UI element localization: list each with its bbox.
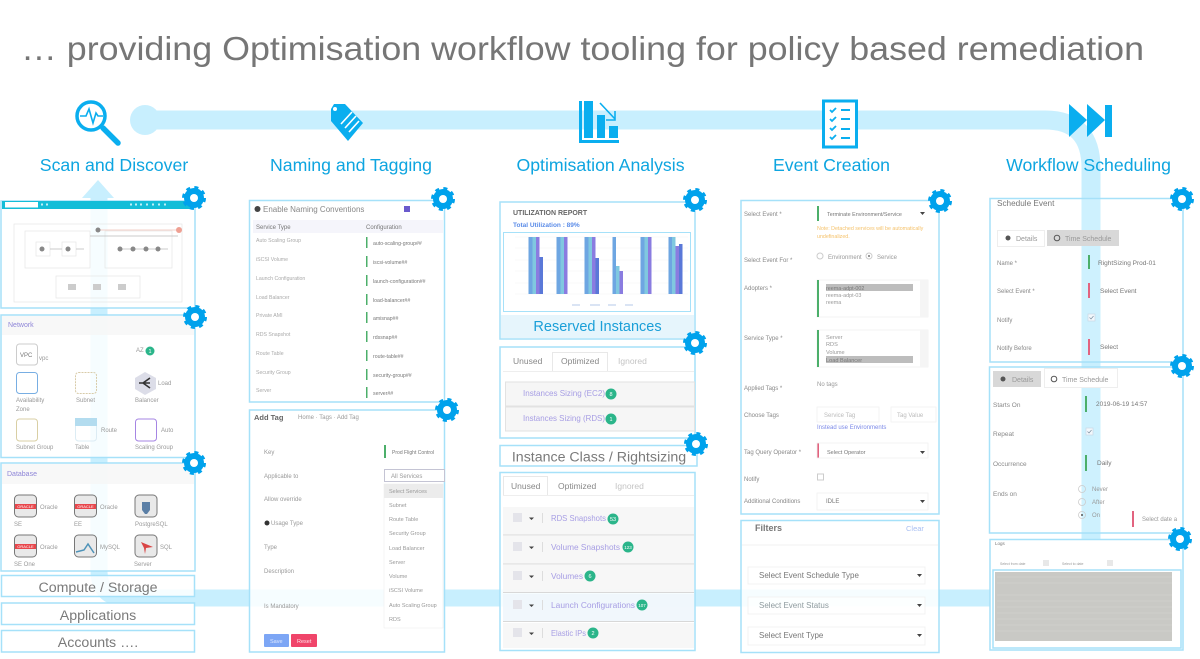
- panel: event creation form: Additional Conditions: [744, 499, 800, 505]
- panel: event creation form: Tag Query Operator *: [744, 450, 802, 456]
- icon: gear 2: [184, 306, 206, 328]
- panel: logs: Logs: [995, 541, 1006, 546]
- box: Instance Class / Rightsizing: Instance Class / Rightsizing: [512, 450, 686, 466]
- panel: event creation form: Terminate Environment/Service: [827, 212, 902, 218]
- panel: unused resources: 107: [638, 603, 646, 608]
- panel: naming conventions: Route Table: [256, 351, 284, 357]
- panel: unused resources: Ignored: [615, 481, 644, 491]
- panel: naming conventions: RDS Snapshot: [256, 332, 291, 338]
- panel: event creation form: reema: [826, 300, 841, 306]
- panel: architecture diagram: [1, 201, 195, 308]
- panel: unused resources: 53: [610, 517, 616, 523]
- panel: add tag form: Allow override: [264, 497, 302, 503]
- icon: gear 11: [1172, 356, 1192, 376]
- panel: naming conventions: Launch Configuration: [256, 276, 305, 282]
- panel: time schedule: Details: [1012, 377, 1034, 384]
- panel: database: Server: [134, 562, 152, 568]
- panel: utilization report: [500, 202, 695, 339]
- panel: naming conventions: Enable Naming Conventions: [263, 205, 364, 214]
- panel: network: 1: [148, 349, 152, 355]
- panel: unused resources: [500, 472, 695, 650]
- panel: time schedule: Never: [1092, 487, 1108, 493]
- panel: unused resources: Launch Configurations: [551, 600, 635, 610]
- panel: add tag form: Applicable to: [264, 474, 299, 480]
- panel: event creation form: Tag Value: [897, 413, 924, 419]
- panel: schedule event details: Schedule Event: [997, 199, 1055, 208]
- icon: gear 12: [1170, 528, 1190, 550]
- panel: add tag form: Reset: [297, 639, 312, 645]
- panel: event creation form: Instead use Environments: [817, 425, 886, 431]
- panel: time schedule: Occurrence: [993, 461, 1027, 468]
- panel: database: Database: [7, 471, 37, 478]
- panel: event creation form: Adopters *: [744, 286, 773, 292]
- icon: gear 9: [930, 190, 950, 212]
- panel: time schedule: Select date a: [1142, 517, 1178, 523]
- panel: network: Zone: [16, 407, 30, 413]
- panel: filters: Select Event Schedule Type: [759, 571, 859, 580]
- panel: event creation form: Service Tag: [824, 413, 855, 419]
- panel: unused resources: RDS Snapshots: [551, 513, 606, 523]
- panel: naming conventions: Security Group: [256, 370, 291, 376]
- heading: Workflow Scheduling: Workflow Scheduling: [1006, 155, 1171, 175]
- icon: gear 4: [432, 188, 454, 210]
- icon: gear 6: [684, 190, 706, 210]
- panel: event creation form: Note: Detached services will be automatically: [817, 226, 924, 232]
- panel: optimized instances: 1: [609, 417, 613, 423]
- panel: unused resources: Elastic IPs: [551, 628, 586, 638]
- panel: unused resources: Unused: [511, 481, 541, 491]
- box: Compute / Storage: [2, 576, 194, 596]
- panel: unused resources: 6: [588, 574, 592, 580]
- panel: schedule event details: Notify: [997, 318, 1012, 324]
- panel: database: SQL: [160, 545, 173, 551]
- panel: event creation form: Notify: [744, 477, 759, 483]
- panel: utilization report: UTILIZATION REPORT: [513, 210, 588, 217]
- panel: naming conventions: load-balancer##: [373, 298, 410, 304]
- panel: event creation form: Choose Tags: [744, 413, 779, 419]
- panel: database: Oracle: [40, 545, 58, 551]
- panel: add tag form: Route Table: [389, 517, 418, 523]
- panel: add tag form: Add Tag: [254, 413, 284, 422]
- heading: Naming and Tagging: Naming and Tagging: [270, 155, 432, 175]
- panel: event creation form: reema-adpt-002: [826, 286, 864, 292]
- panel: unused resources: Optimized: [558, 481, 597, 491]
- panel: add tag form: Select Services: [389, 489, 427, 495]
- panel: network: Balancer: [135, 398, 159, 404]
- panel: naming conventions: rdssnap##: [373, 335, 397, 341]
- panel: schedule event details: RightSizing Prod-01: [1098, 260, 1156, 267]
- panel: network: Subnet Group: [16, 445, 54, 451]
- panel: unused resources: Volume Snapshots: [551, 542, 620, 552]
- panel: network: vpc: [39, 356, 48, 362]
- panel: event creation form: Applied Tags *: [744, 386, 783, 392]
- panel: event creation form: RDS: [826, 342, 838, 348]
- panel: schedule event details: Select: [1100, 344, 1118, 351]
- panel: naming conventions: [250, 200, 444, 402]
- panel: database: SE: [14, 522, 22, 528]
- heading: Optimisation Analysis: Optimisation Analysis: [516, 155, 685, 175]
- panel: naming conventions: server##: [373, 391, 393, 397]
- panel: event creation form: Volume: [826, 350, 845, 356]
- box: Compute / Storage: Compute / Storage: [38, 580, 158, 596]
- panel: add tag form: Auto Scaling Group: [389, 603, 437, 609]
- panel: optimized instances: Unused: [513, 356, 543, 366]
- icon: gear 7: [684, 332, 706, 354]
- panel: naming conventions: Server: [256, 388, 272, 394]
- panel: optimized instances: Ignored: [618, 356, 647, 366]
- panel: event creation form: [741, 200, 939, 514]
- icon: fast forward: [1069, 104, 1112, 137]
- panel: naming conventions: Service Type: [256, 225, 291, 231]
- panel: naming conventions: Configuration: [366, 225, 402, 231]
- panel: time schedule: Repeat: [993, 431, 1014, 438]
- panel: schedule event details: Details: [1016, 236, 1038, 243]
- panel: time schedule: Daily: [1097, 460, 1112, 467]
- panel: optimized instances: Optimized: [561, 356, 600, 366]
- panel: naming conventions: auto-scaling-group##: [373, 241, 422, 247]
- panel: add tag form: Key: [264, 450, 274, 456]
- panel: filters: Select Event Type: [759, 631, 824, 640]
- panel: event creation form: undefinalized.: [817, 234, 850, 240]
- panel: add tag form: Usage Type: [271, 521, 304, 527]
- box: Applications: [2, 603, 194, 624]
- panel: event creation form: Service: [877, 255, 898, 261]
- panel: database: [1, 463, 195, 571]
- panel: network: Subnet: [76, 398, 95, 404]
- panel: database: ORACLE: [77, 504, 94, 509]
- panel: logs: [990, 540, 1183, 650]
- panel: time schedule: [990, 367, 1183, 533]
- panel: time schedule: 2019-06-19 14:57: [1096, 401, 1148, 408]
- icon: gear 3: [184, 452, 204, 474]
- panel: network: AZ: [136, 348, 144, 354]
- panel: add tag form: Server: [389, 560, 405, 566]
- panel: filters: Select Event Status: [759, 601, 829, 610]
- panel: add tag form: Save: [270, 639, 283, 645]
- box: Accounts: [2, 630, 194, 652]
- panel: add tag form: Type: [264, 545, 278, 551]
- panel: add tag form: iSCSI Volume: [389, 588, 423, 594]
- panel: naming conventions: iSCSI Volume: [256, 257, 288, 263]
- panel: naming conventions: Load Balancer: [256, 295, 290, 301]
- panel: unused resources: 123: [624, 545, 632, 550]
- panel: logs: Select from date: [1000, 562, 1026, 566]
- title: … providing Optimisation workflow tooling for policy based remediation: [21, 30, 1144, 67]
- panel: add tag form: Subnet: [389, 503, 407, 509]
- panel: network: Scaling Group: [135, 445, 174, 451]
- panel: event creation form: Load Balancer: [826, 358, 862, 364]
- panel: database: PostgreSQL: [135, 522, 168, 528]
- panel: network: Auto: [161, 428, 174, 434]
- panel: event creation form: No tags: [817, 382, 838, 388]
- panel: naming conventions: security-group##: [373, 373, 412, 379]
- icon: gear 5: [436, 400, 458, 420]
- panel: event creation form: reema-adpt-03: [826, 293, 861, 299]
- panel: event creation form: Select Operator: [827, 450, 866, 456]
- panel: database: MySQL: [100, 545, 121, 551]
- panel: network: Availability: [16, 398, 44, 404]
- panel: network: Route: [101, 428, 118, 434]
- panel: event creation form: Environment: [828, 255, 862, 261]
- icon: checklist: [824, 101, 856, 147]
- panel: unused resources: Volumes: [551, 571, 583, 581]
- panel: network: Table: [75, 445, 90, 451]
- panel: time schedule: Starts On: [993, 402, 1021, 409]
- heading: Event Creation: Event Creation: [773, 155, 890, 175]
- panel: naming conventions: Private AMI: [256, 313, 283, 319]
- panel: add tag form: Is Mandatory: [264, 604, 299, 610]
- panel: network: VPC: [20, 353, 33, 359]
- panel: naming conventions: launch-configuration##: [373, 279, 426, 285]
- icon: chart with down arrow: [579, 101, 619, 143]
- panel: add tag form: All Services: [391, 474, 422, 480]
- icon: tag: [331, 104, 363, 141]
- panel: event creation form: Server: [826, 335, 843, 341]
- panel: time schedule: After: [1092, 500, 1105, 506]
- panel: schedule event details: Select Event: [1100, 288, 1137, 295]
- panel: schedule event details: Select Event *: [997, 289, 1035, 295]
- box: Applications: Applications: [60, 608, 136, 624]
- panel: network: [1, 315, 195, 458]
- panel: optimized instances: [500, 347, 695, 438]
- panel: naming conventions: route-table##: [373, 354, 404, 360]
- panel: filters: [741, 520, 939, 652]
- panel: naming conventions: iscsi-volume##: [373, 260, 407, 266]
- panel: event creation form: Service Type *: [744, 336, 783, 342]
- panel: schedule event details: Name *: [997, 261, 1018, 267]
- panel: add tag form: Security Group: [389, 531, 426, 537]
- icon: gear 8: [686, 434, 706, 454]
- panel: add tag form: RDS: [389, 617, 401, 623]
- bar chart: [504, 232, 690, 312]
- panel: utilization report: Total Utilization : 89%: [513, 222, 580, 229]
- panel: network: Load: [158, 381, 171, 387]
- panel: add tag form: [250, 410, 444, 652]
- panel: schedule event details: Notify Before: [997, 346, 1032, 352]
- panel: add tag form: Volume: [389, 574, 407, 580]
- panel: optimized instances: Instances Sizing (RDS): [523, 413, 605, 423]
- panel: schedule event details: Time Schedule: [1065, 236, 1112, 243]
- panel: filters: Clear: [906, 524, 924, 533]
- panel: database: ORACLE: [17, 544, 34, 549]
- panel: network: Network: [8, 322, 34, 329]
- box: Instance Class / Rightsizing: [500, 446, 697, 466]
- panel: time schedule: Time Schedule: [1062, 377, 1109, 384]
- panel: database: EE: [74, 522, 82, 528]
- panel: event creation form: Select Event *: [744, 212, 782, 218]
- panel: database: ORACLE: [17, 504, 34, 509]
- panel: utilization report: Reserved Instances: [533, 319, 662, 335]
- heading: Scan and Discover: Scan and Discover: [40, 155, 188, 175]
- panel: event creation form: IDLE: [826, 499, 839, 505]
- panel: database: Oracle: [40, 505, 58, 511]
- panel: add tag form: Description: [264, 569, 294, 575]
- panel: time schedule: On: [1092, 513, 1100, 519]
- panel: naming conventions: Auto Scaling Group: [256, 238, 301, 244]
- panel: event creation form: Select Event For *: [744, 258, 793, 264]
- panel: add tag form: Prod Flight Control: [392, 450, 434, 456]
- panel: add tag form: Home · Tags · Add Tag: [298, 415, 359, 421]
- panel: database: SE One: [14, 562, 36, 568]
- icon: gear 10: [1172, 188, 1192, 210]
- panel: unused resources: 2: [591, 631, 595, 637]
- box: Accounts: Accounts ….: [58, 635, 138, 651]
- panel: optimized instances: 8: [609, 392, 613, 398]
- workflow band arrow: [82, 105, 1091, 598]
- panel: database: Oracle: [100, 505, 118, 511]
- icon: gear 1: [184, 188, 204, 208]
- panel: logs: Select to date: [1062, 562, 1083, 566]
- panel: naming conventions: amisnap##: [373, 316, 398, 322]
- panel: schedule event details: [990, 198, 1183, 362]
- panel: add tag form: Load Balancer: [389, 546, 425, 552]
- panel: time schedule: Ends on: [993, 491, 1017, 498]
- panel: optimized instances: Instances Sizing (EC2): [523, 388, 605, 398]
- panel: filters: Filters: [755, 523, 782, 533]
- icon: magnifier scan: [77, 102, 118, 143]
